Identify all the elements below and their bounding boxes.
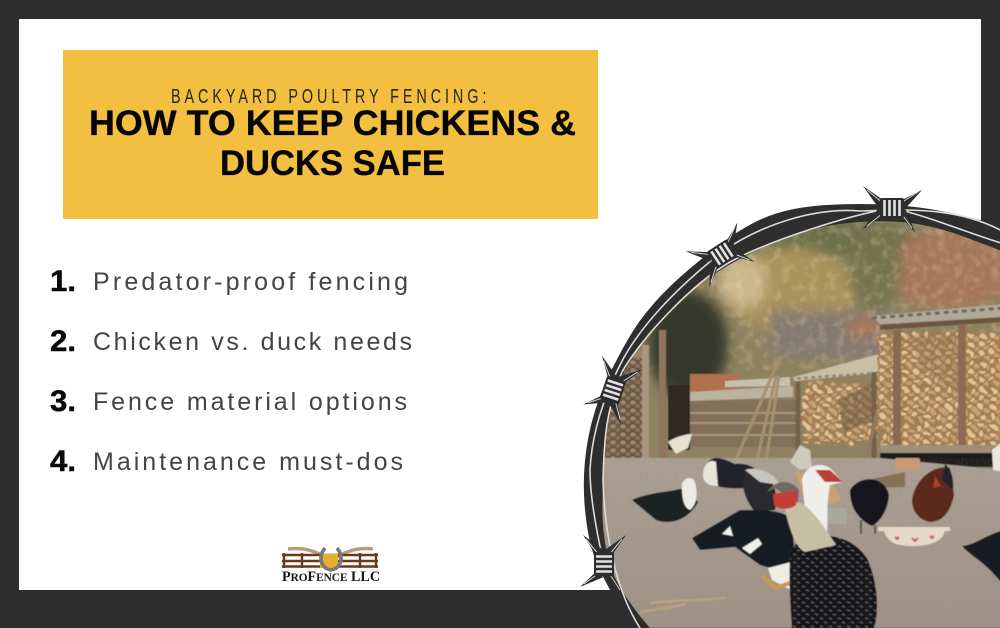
duck back [703, 458, 780, 512]
duck right edge [962, 530, 1000, 585]
left woodpile and posts [604, 330, 690, 462]
subtitle: BACKYARD POULTRY FENCING: [171, 85, 486, 108]
logo: ProFence LLC: PROFENCE LLC [282, 569, 380, 585]
large woodpile [872, 304, 1000, 472]
large black duck [692, 510, 795, 590]
white hen [668, 434, 692, 454]
barbed wire ring [580, 186, 1000, 628]
item 1: Predator-proof fencing [93, 268, 408, 296]
item 1: 1. [50, 265, 76, 298]
small bowl and log [868, 458, 920, 488]
grey dish [827, 508, 847, 524]
heading line 1: HOW TO KEEP CHICKENS & [89, 104, 576, 143]
tan hen [795, 470, 840, 504]
dry stalks [640, 598, 725, 612]
barb upper left [686, 219, 760, 290]
white muscovy duck [801, 464, 843, 532]
ground [590, 458, 1000, 628]
heading line 2: DUCKS SAFE [220, 144, 445, 183]
item 2: Chicken vs. duck needs [93, 328, 412, 356]
numbered list [50, 265, 412, 478]
black hen [850, 479, 889, 534]
left shed [690, 357, 798, 462]
big rooster [767, 482, 877, 628]
item 2: 2. [50, 325, 76, 358]
title banner [63, 50, 598, 219]
item 3: Fence material options [93, 388, 407, 416]
barb top [863, 186, 922, 232]
item 4: Maintenance must-dos [93, 448, 403, 476]
logo: ProFence LLC [282, 548, 380, 585]
small duck back center [790, 445, 812, 470]
dark band of barbed wire backing [584, 204, 1000, 628]
item 4: 4. [50, 445, 76, 478]
barb lower left [580, 535, 626, 594]
photo: poultry yard [590, 210, 1000, 628]
duck left [632, 478, 698, 522]
feeding bowl [878, 527, 950, 546]
barb left [581, 355, 643, 425]
middle woodpile [790, 354, 878, 458]
red hen [912, 464, 954, 522]
item 3: 3. [50, 385, 76, 418]
background trees [632, 221, 1000, 470]
white duck right edge [992, 440, 1000, 472]
